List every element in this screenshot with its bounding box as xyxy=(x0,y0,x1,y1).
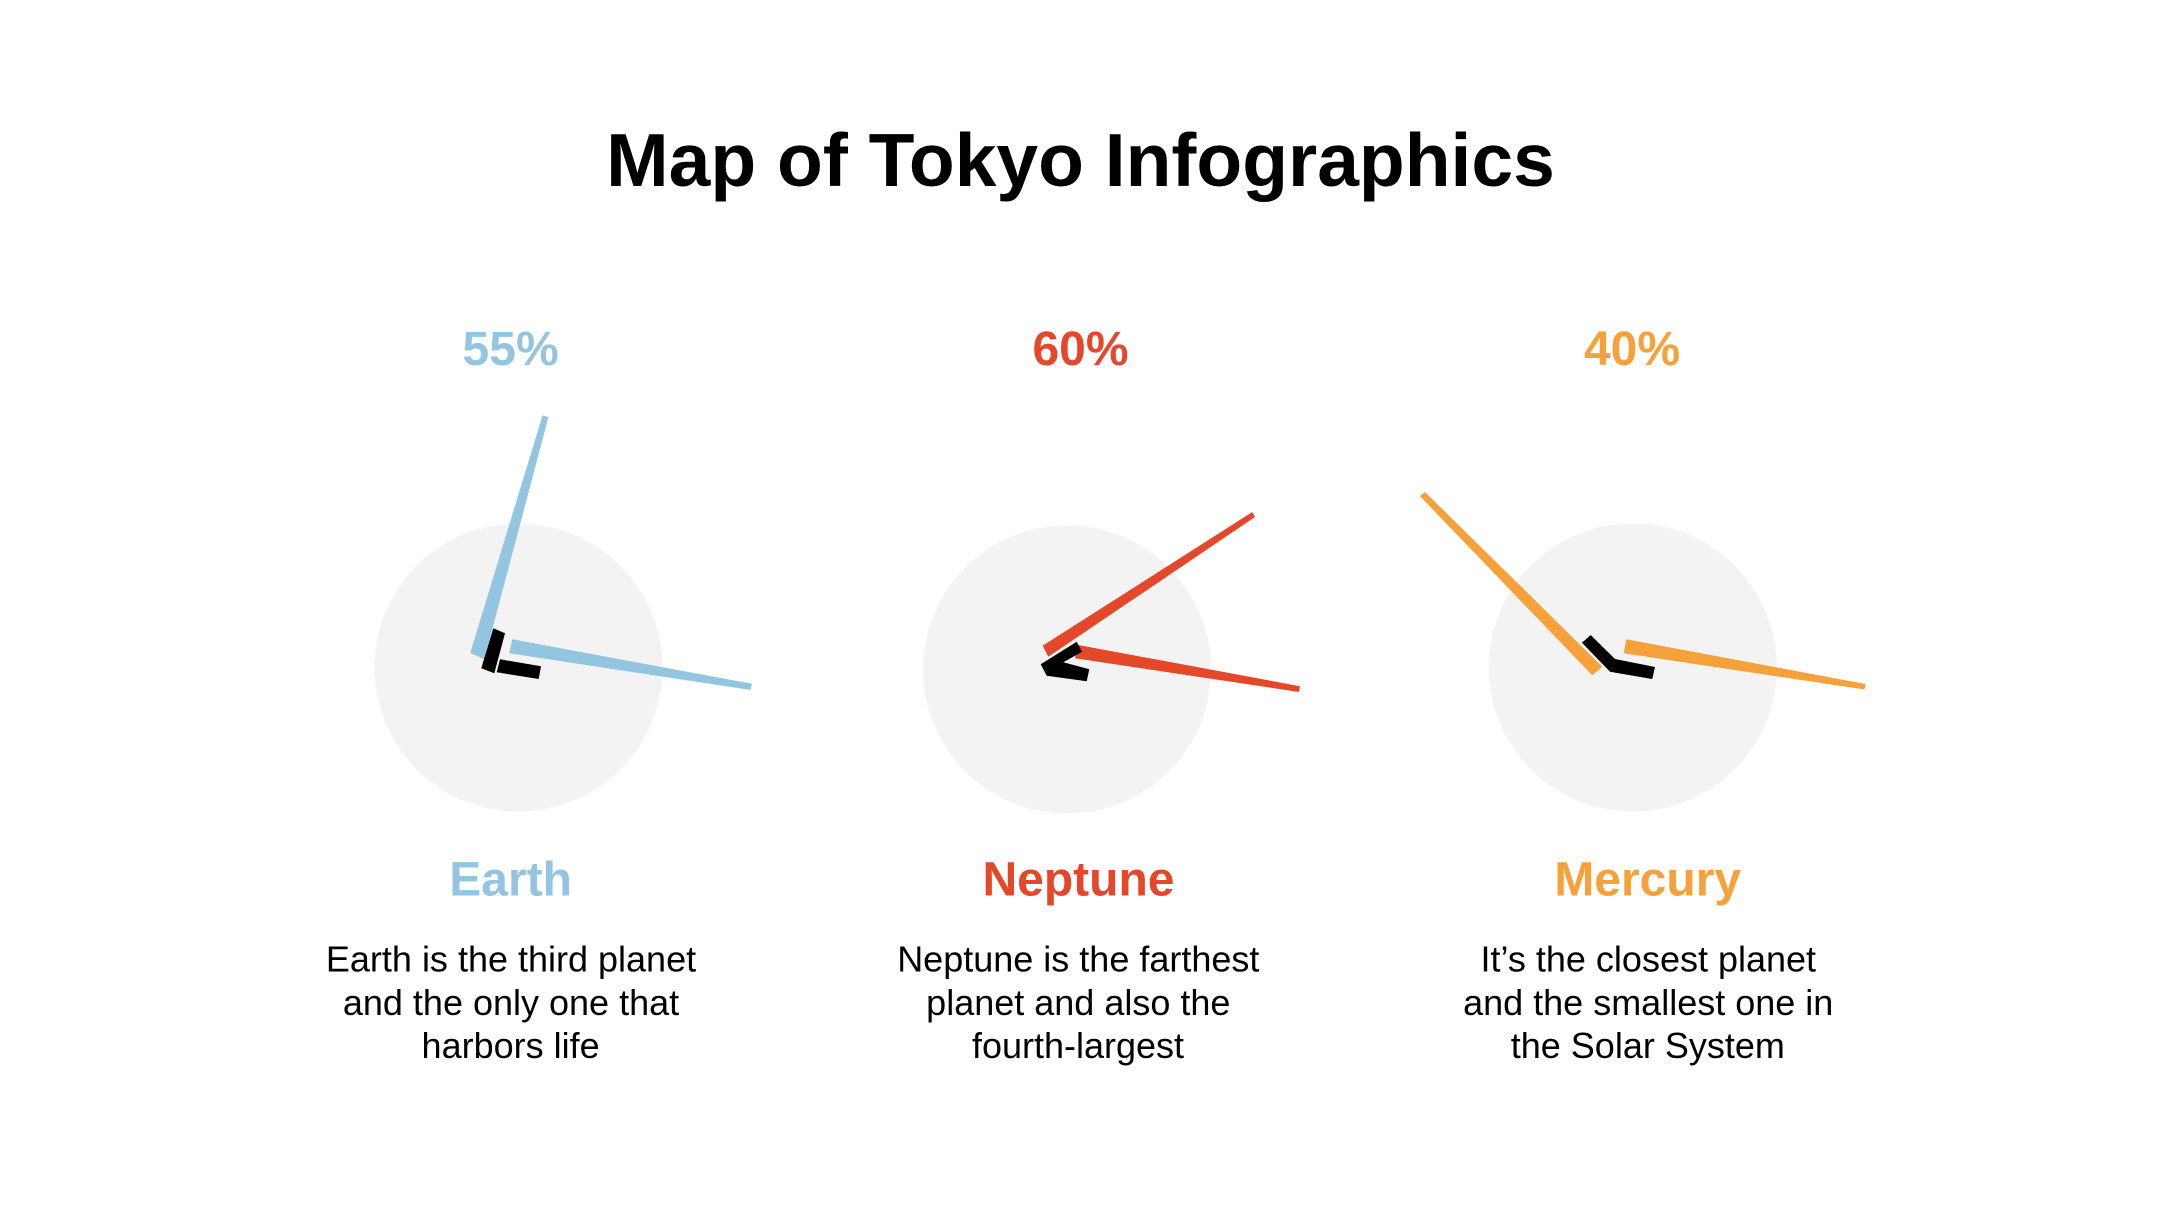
description: Earth: Earth is the third planet xyxy=(326,939,696,980)
description: Mercury: and the smallest one in xyxy=(1463,982,1833,1023)
percentage: Neptune 60%: 60% xyxy=(1032,323,1129,376)
panel: Neptune xyxy=(897,323,1300,1066)
heading: Earth: Earth xyxy=(449,854,572,906)
description: Earth: harbors life xyxy=(422,1025,600,1066)
description: Mercury: It’s the closest planet xyxy=(1481,939,1816,980)
panel: Earth xyxy=(326,323,752,1066)
gauge: Mercury xyxy=(1420,492,1866,812)
description: Neptune: planet and also the xyxy=(926,982,1230,1023)
description: Neptune: fourth-largest xyxy=(972,1025,1184,1066)
gauge: Neptune xyxy=(923,512,1300,814)
description: Mercury: the Solar System xyxy=(1511,1025,1785,1066)
description: Neptune: Neptune is the farthest xyxy=(897,939,1259,980)
percentage: Mercury 40%: 40% xyxy=(1584,323,1680,376)
description: Earth: and the only one that xyxy=(343,982,679,1023)
title: Map of Tokyo Infographics xyxy=(606,118,1555,202)
heading: Mercury: Mercury xyxy=(1554,854,1741,906)
gauge: Earth xyxy=(374,416,752,812)
percentage: Earth 55%: 55% xyxy=(463,323,559,376)
heading: Neptune: Neptune xyxy=(982,854,1174,906)
panel: Mercury xyxy=(1420,323,1866,1066)
